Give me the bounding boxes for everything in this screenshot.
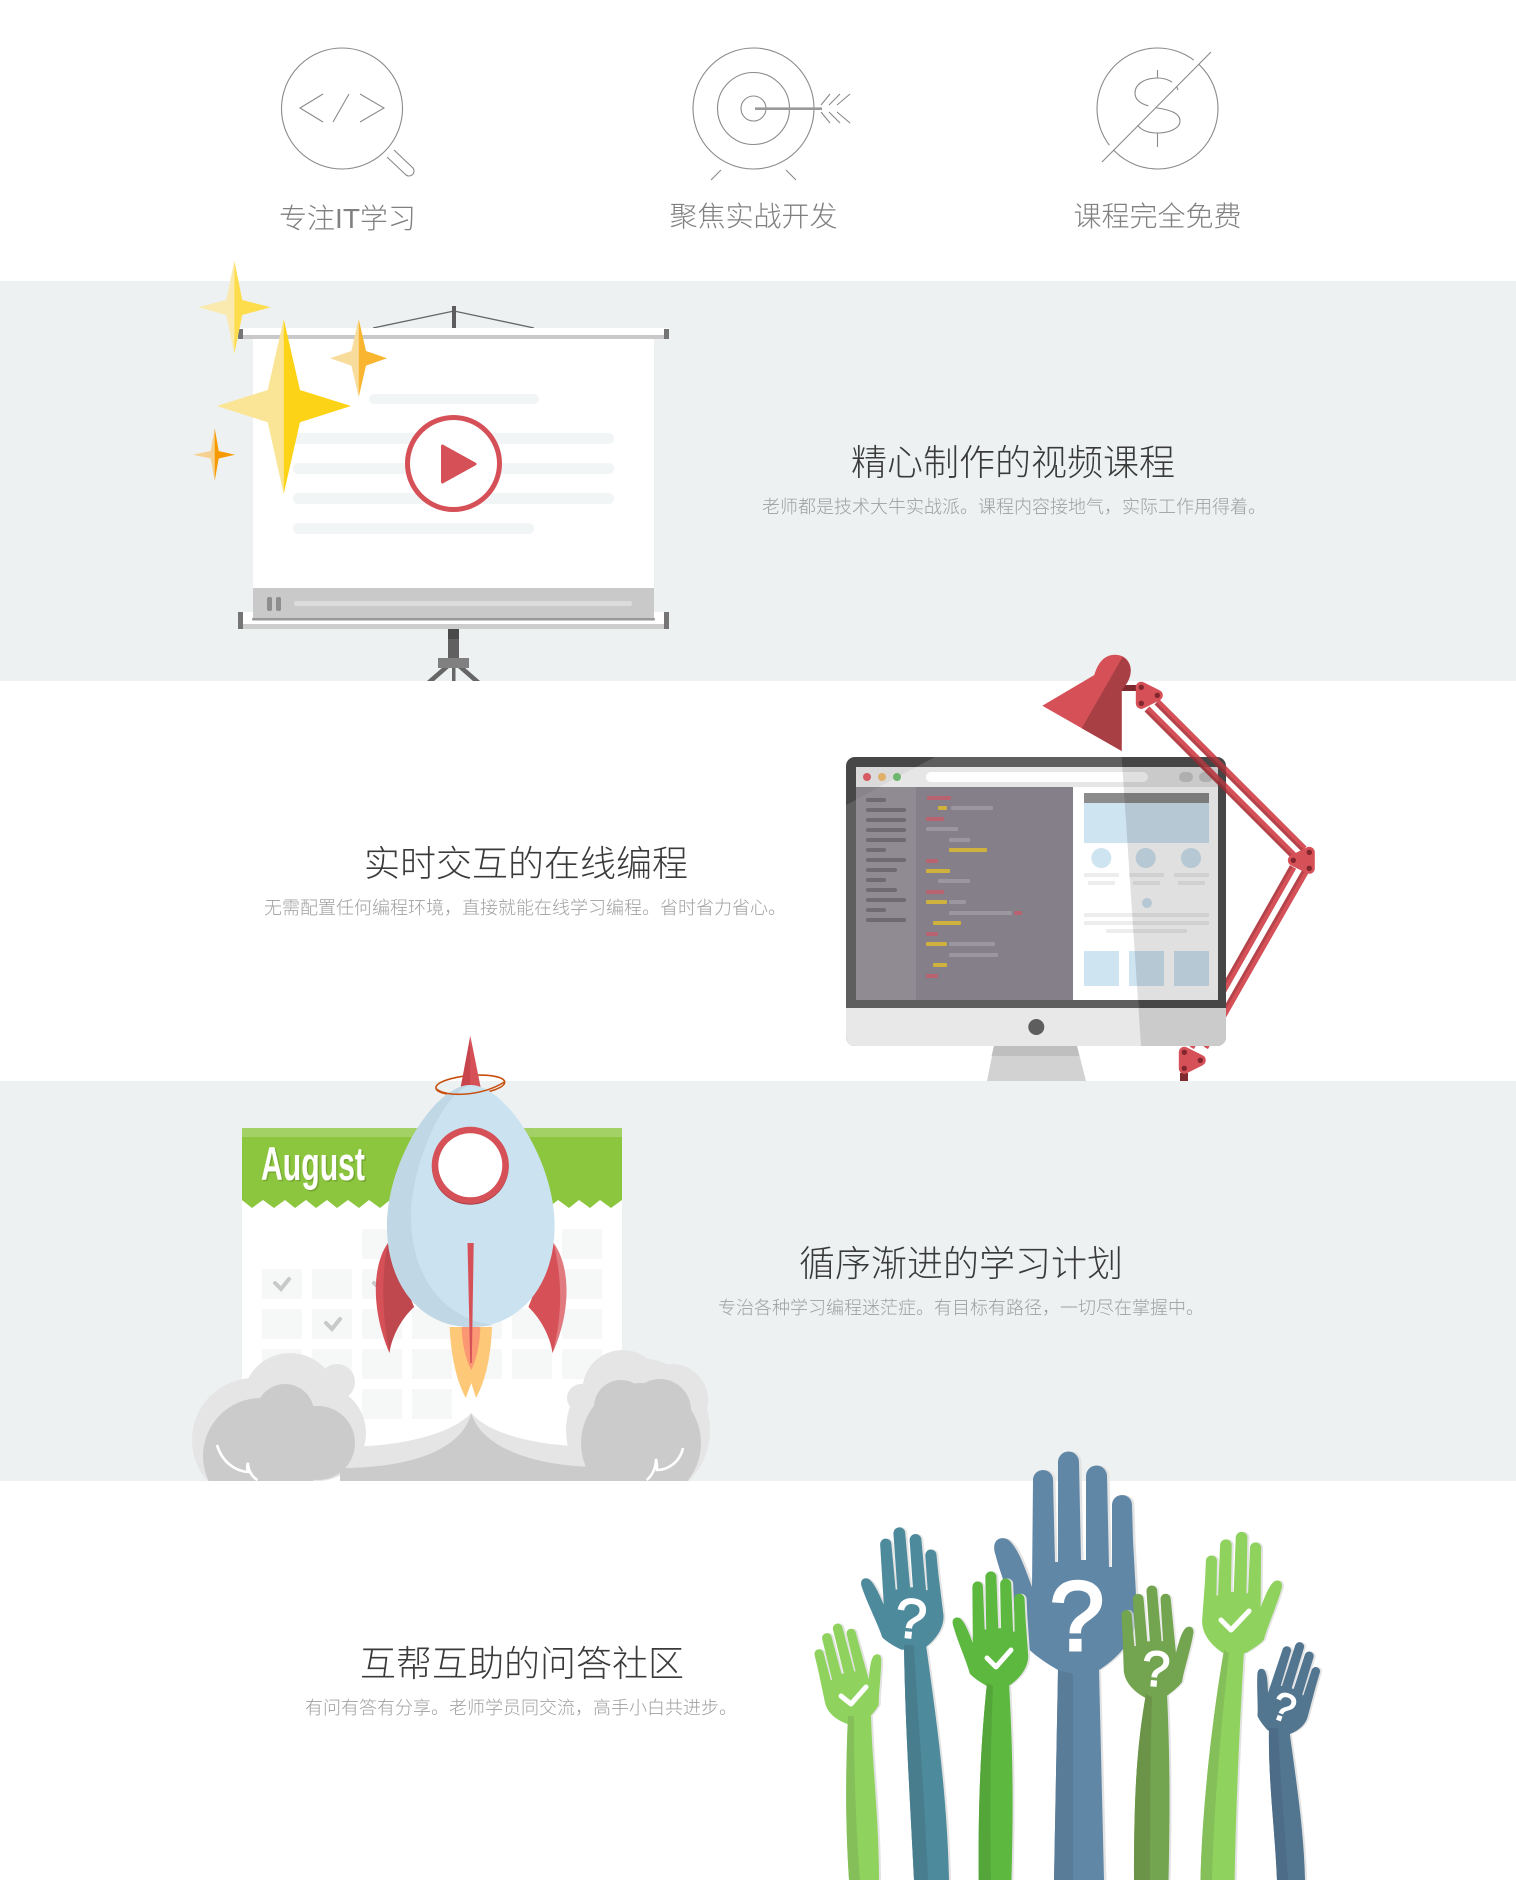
smoke clouds and exhaust [192,1350,710,1481]
left fin [376,1243,414,1353]
slide text lines [293,394,614,534]
lamp light shadow on monitor [846,757,1226,1046]
file sidebar [856,787,916,1000]
icon: play button [408,418,500,510]
hand: slate right [1242,1632,1331,1880]
lamp upper arms [1147,701,1305,856]
hand: olive [1117,1582,1201,1880]
calendar [242,1128,622,1481]
label: free courses: 课程完全免费 [1073,201,1242,232]
label: practical focus: 聚焦实战开发 [669,201,838,232]
background band: video section [0,281,1516,681]
sparkle: orange medium [330,319,387,397]
rocket ring back [435,1074,506,1095]
monitor [846,701,1305,1046]
sparkle: small gold [198,261,271,354]
illustration: projector screen with stars [193,261,669,681]
lamp joints [1121,685,1312,871]
heading: video courses: 精心制作的视频课程 [851,442,1175,483]
calendar month: August [261,1137,365,1190]
hand: teal [857,1525,951,1880]
monitor stand [987,1046,1086,1081]
hand: mid green [952,1571,1031,1880]
illustration: desk lamp and monitor [846,655,1312,1081]
screen top roller [238,328,669,339]
tripod stand [427,629,480,681]
rocket body [387,1085,555,1327]
lamp base joint [1180,1050,1203,1081]
description: live coding: 无需配置任何编程环境，直接就能在线学习编程。省时省力省心。 [264,898,786,918]
illustration: raised hands [806,1452,1331,1880]
lamp lower arms [1191,867,1306,1048]
monitor button [1028,1019,1044,1035]
browser toolbar [856,767,1218,787]
hand: light green left [806,1615,897,1880]
flame [450,1327,492,1398]
screen surface [253,339,654,589]
hand: teal: ? [892,1586,930,1651]
hand: large blue: ? [1050,1561,1104,1671]
icon: crossed-out dollar [1097,48,1218,169]
hand: olive: ? [1140,1640,1172,1698]
back smoke [192,1350,710,1481]
sparkle: small orange [193,428,235,481]
smoke highlights [217,1445,683,1480]
description: community: 有问有答有分享。老师学员同交流，高手小白共进步。 [305,1698,737,1718]
rocket ring front [436,1082,504,1094]
hand: light green right [1200,1531,1285,1880]
description: video courses: 老师都是技术大牛实战派。课程内容接地气，实际工作用得着。 [762,497,1266,517]
hand: slate right: ? [1266,1683,1302,1732]
heading: learning plan: 循序渐进的学习计划 [799,1243,1123,1284]
illustration: calendar and rocket [192,1036,710,1514]
bottom roller [238,612,669,629]
heading: live coding: 实时交互的在线编程 [364,843,688,884]
right fin [528,1243,567,1353]
calendar green header [242,1137,622,1208]
icon: target with arrow [693,48,850,180]
rocket nose [461,1036,481,1087]
calendar page [242,1200,622,1481]
sparkle: large yellow [217,319,351,494]
calendar checks [275,1279,388,1329]
label: IT focus: 专注IT学习 [279,203,416,234]
rocket [376,1036,567,1398]
monitor frame [846,757,1226,1046]
front smoke [203,1379,701,1481]
hanger [373,306,534,328]
calendar cells [262,1229,602,1419]
heading: community: 互帮互助的问答社区 [360,1643,684,1684]
browser window dots [863,773,901,781]
lamp shade [1042,655,1131,751]
background band: plan section [0,1081,1516,1481]
hand: large blue [994,1452,1140,1880]
web page preview [1073,787,1218,1000]
description: learning plan: 专治各种学习编程迷茫症。有目标有路径，一切尽在掌握中。 [718,1298,1204,1318]
calendar month [262,1147,366,1192]
monitor chin [846,1008,1226,1046]
rocket window [432,1127,509,1205]
center fin [468,1243,474,1363]
video control bar [252,588,655,620]
icon: magnifier with code [282,48,414,176]
code editor [916,787,1073,1000]
calendar month: August [262,1138,367,1192]
